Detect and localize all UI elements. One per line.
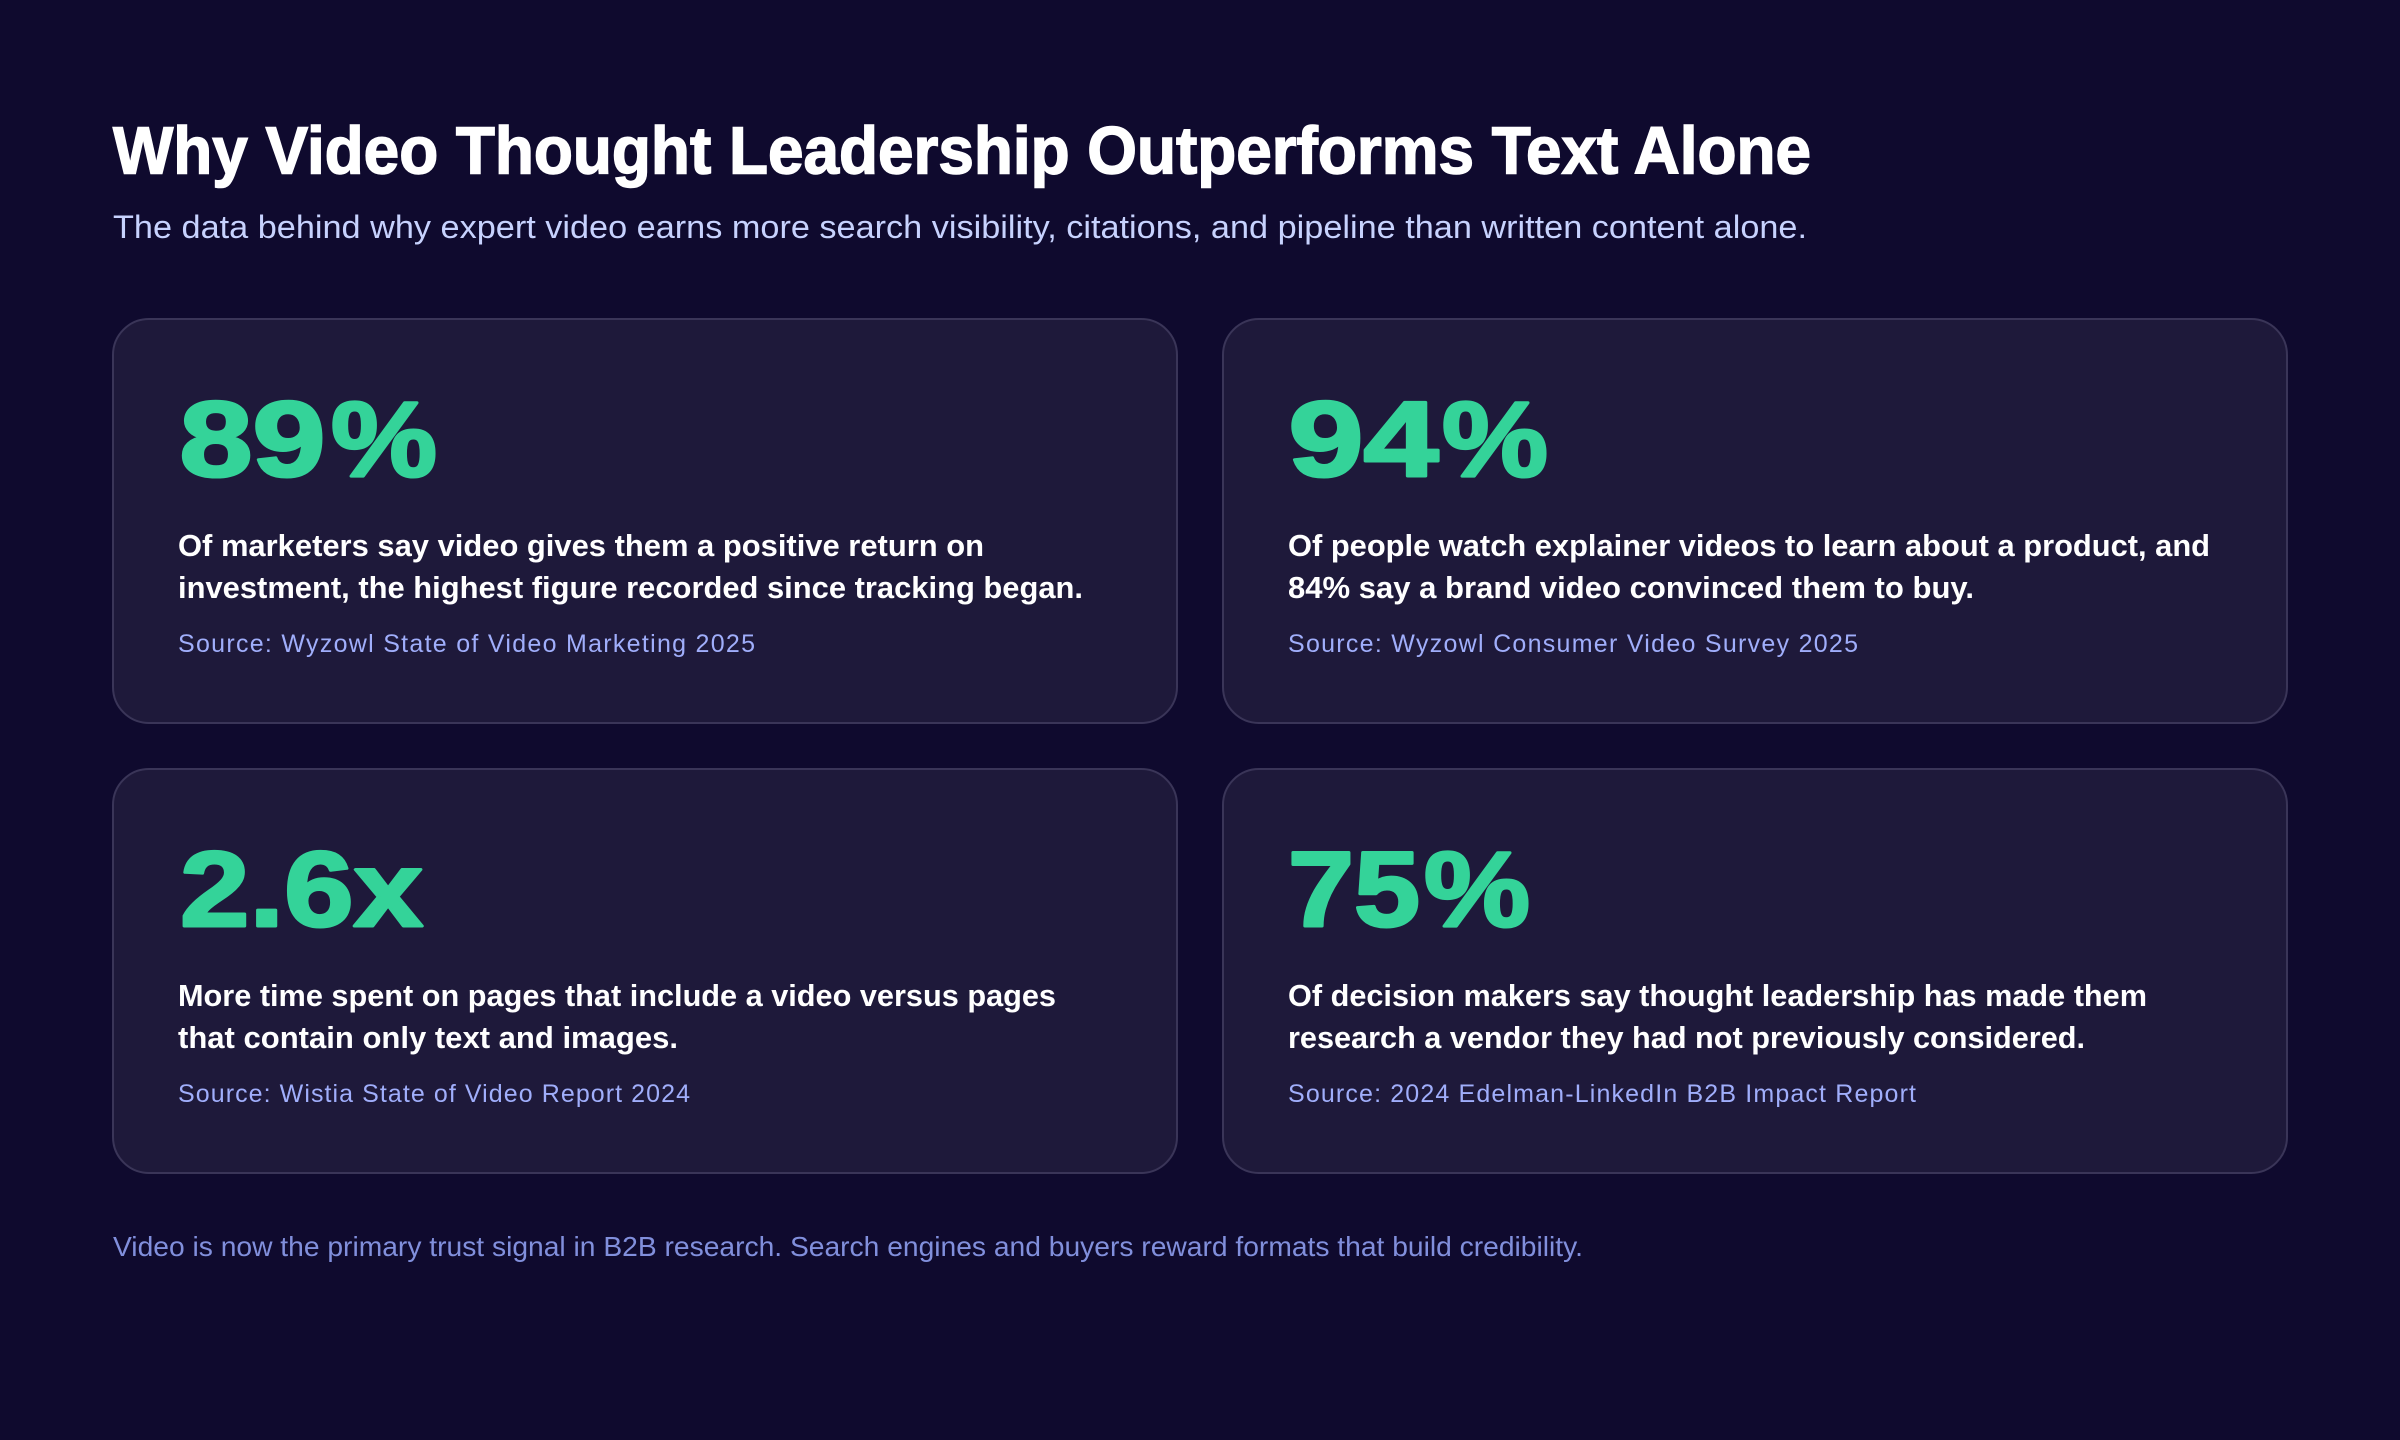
description: marketers ROI: investment, the highest figure recorded since tracking began. xyxy=(178,570,1083,605)
stat: 89%: 89 xyxy=(180,379,326,499)
stat: 89%: % xyxy=(331,379,437,499)
stat: 89% xyxy=(180,379,437,499)
source: Edelman-LinkedIn report: Source: 2024 Edelman-LinkedIn B2B Impact Report xyxy=(1288,1080,1916,1108)
footer note: Video is now the primary trust signal in B2B research. Search engines and buyers reward formats that build credibility. xyxy=(113,1231,1583,1262)
panel: 75% decision makers xyxy=(1223,769,2287,1173)
panel: 2.6x time on page xyxy=(113,769,1177,1173)
description: time on page: More time spent on pages that include a video versus pages xyxy=(178,978,1056,1013)
description: time on page: that contain only text and images. xyxy=(178,1020,678,1055)
stat: 94%: 94 xyxy=(1288,379,1438,499)
source: Wyzowl State of Video Marketing: Source: Wyzowl State of Video Marketing 2025 xyxy=(178,630,755,658)
description: marketers ROI: Of marketers say video gives them a positive return on xyxy=(178,528,984,563)
stat: 2.6x: 2.6x xyxy=(180,829,423,949)
subtitle: The data behind why expert video earns more search visibility, citations, and pipeline than written content alone. xyxy=(113,209,1807,245)
description: decision makers: Of decision makers say thought leadership has made them xyxy=(1288,978,2147,1013)
source: Wyzowl Consumer Video Survey: Source: Wyzowl Consumer Video Survey 2025 xyxy=(1288,630,1858,658)
panel: 94% explainer videos xyxy=(1223,319,2287,723)
title: Why Video Thought Leadership Outperforms Text Alone xyxy=(113,114,1811,188)
description: decision makers: research a vendor they had not previously considered. xyxy=(1288,1020,2085,1055)
stat: 75% xyxy=(1288,829,1530,949)
source: Wistia State of Video Report: Source: Wistia State of Video Report 2024 xyxy=(178,1080,690,1108)
stat: 94% xyxy=(1288,379,1548,499)
stat: 75%: 75 xyxy=(1288,829,1420,949)
stat: 94%: % xyxy=(1442,379,1548,499)
description: explainer videos: 84% say a brand video convinced them to buy. xyxy=(1288,570,1974,605)
panel: 89% marketers ROI xyxy=(113,319,1177,723)
stat: 75%: % xyxy=(1424,829,1530,949)
description: explainer videos: Of people watch explainer videos to learn about a product, and xyxy=(1288,528,2210,563)
